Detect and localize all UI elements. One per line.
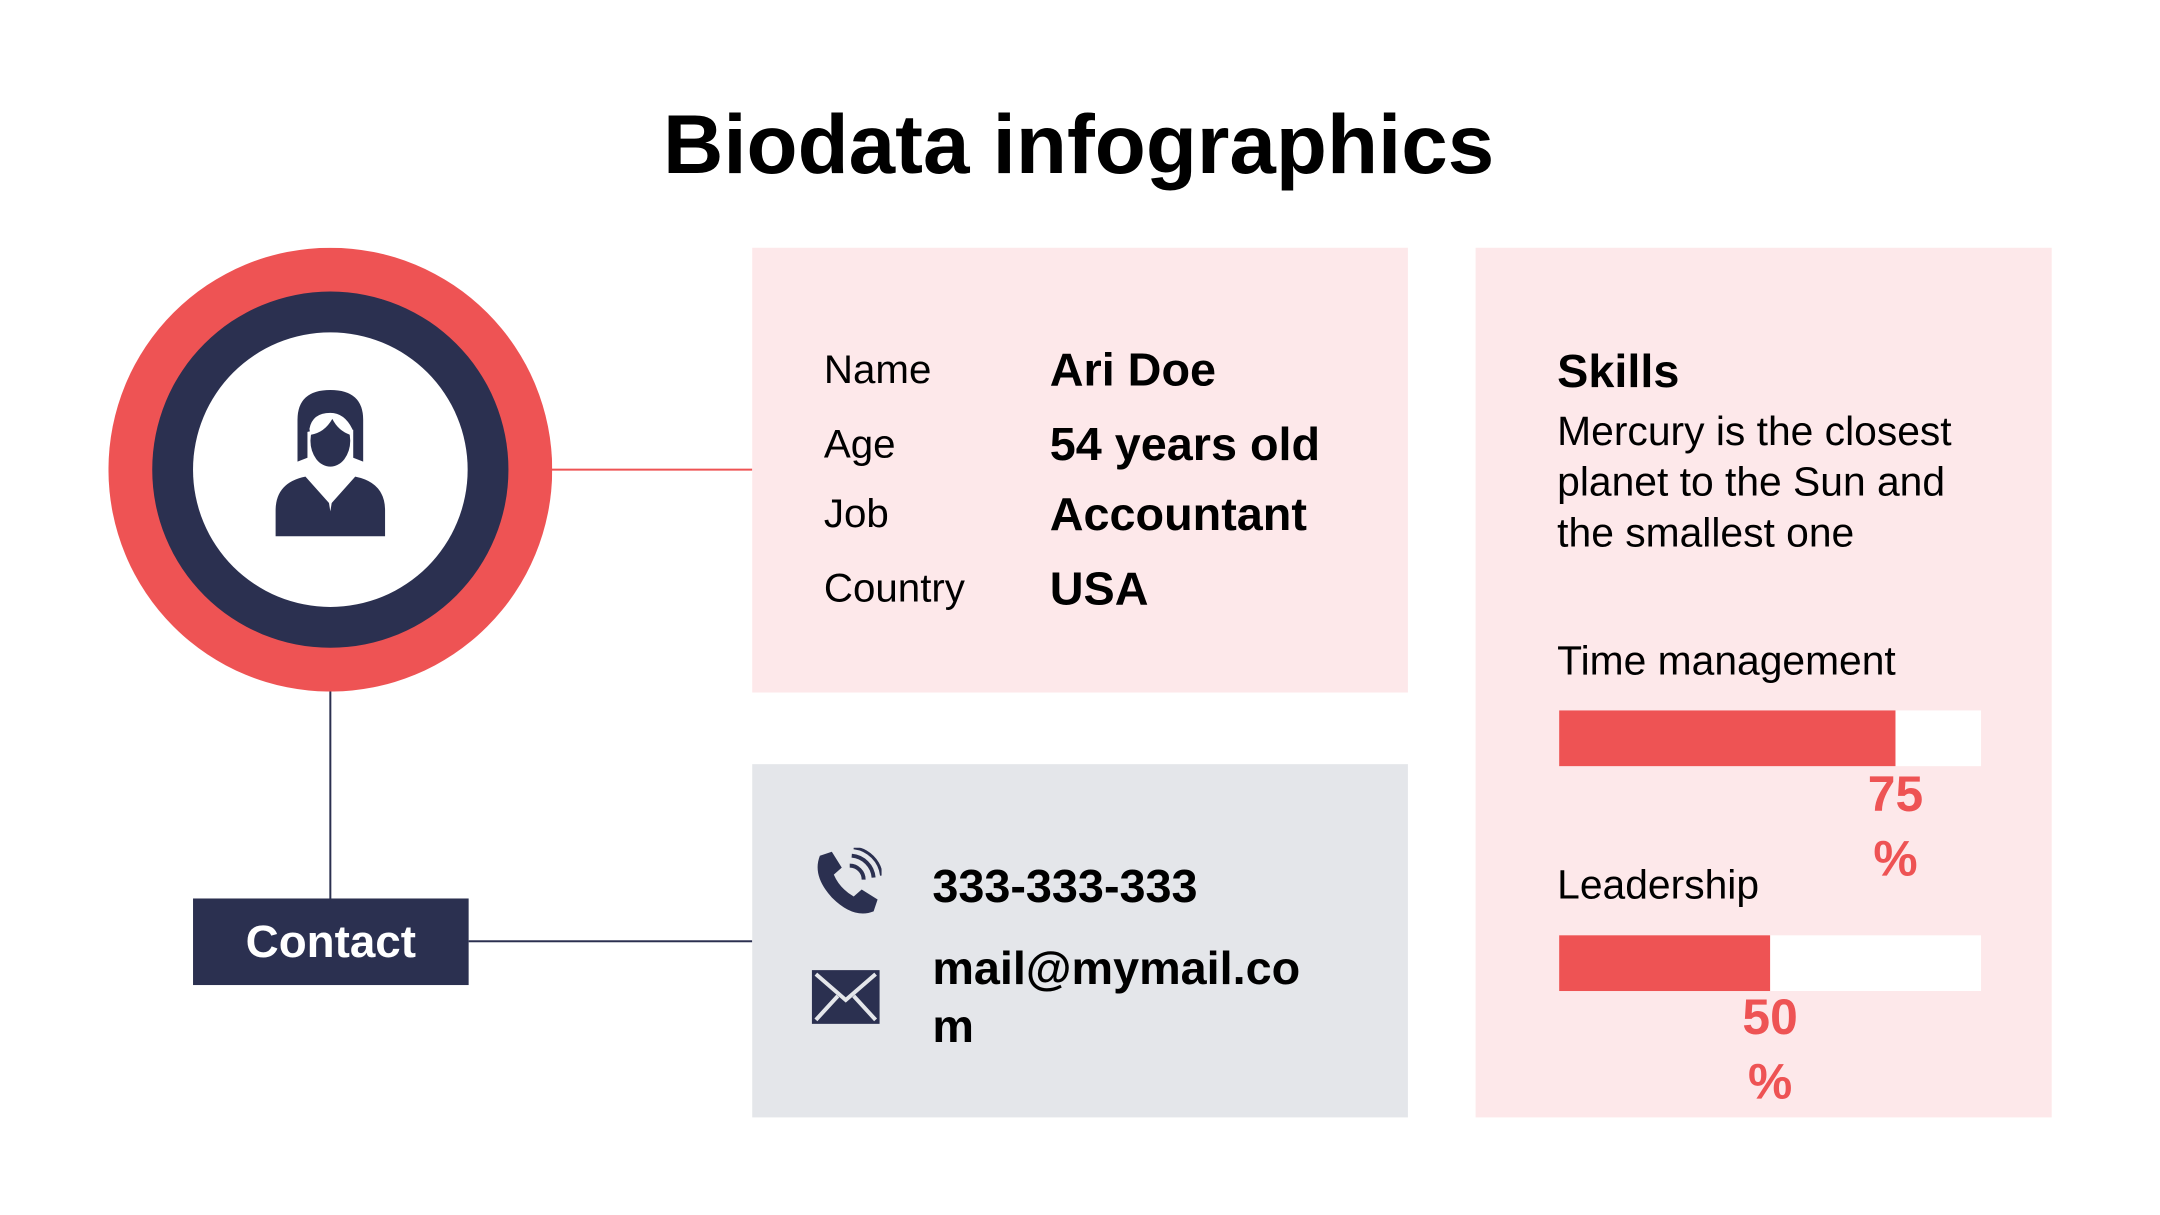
panel: skills: Leadership: [1557, 862, 1759, 907]
avatar circle: [108, 248, 552, 692]
panel: personal info: Name: [824, 346, 931, 392]
contact label: [193, 898, 469, 985]
panel: personal info: Country: [824, 565, 965, 611]
panel: personal info: Ari Doe: [1050, 343, 1216, 396]
panel: skills: Time management: [1557, 638, 1896, 684]
connector: circle to contact: [329, 647, 331, 900]
panel: contact details: mail@mymail.co: [932, 941, 1300, 994]
panel: personal info: [752, 248, 1408, 693]
panel: contact details: [752, 764, 1408, 1117]
contact label: Contact: [246, 915, 416, 967]
panel: personal info: Job: [824, 490, 889, 536]
bar: leadership: [1559, 935, 1981, 991]
panel: contact details: m: [932, 999, 974, 1052]
panel: skills: planet to the Sun and: [1557, 459, 1945, 504]
panel: personal info: Accountant: [1050, 487, 1307, 540]
panel: personal info: USA: [1050, 562, 1148, 614]
panel: contact details: 333-333-333: [932, 859, 1198, 912]
panel: skills: 75: [1868, 766, 1923, 822]
icon: phone: [818, 848, 882, 914]
panel: skills: %: [1748, 1054, 1792, 1109]
panel: skills: %: [1873, 831, 1918, 887]
bar: time management: [1559, 710, 1981, 766]
panel: skills: [1476, 248, 2052, 1117]
panel: skills: Mercury is the closest: [1557, 408, 1952, 454]
connector: contact to panel: [469, 940, 752, 942]
panel: personal info: 54 years old: [1050, 417, 1320, 470]
connector: circle to info: [551, 469, 752, 471]
icon: mail: [812, 970, 880, 1024]
panel: personal info: Age: [824, 421, 896, 466]
panel: skills: 50: [1742, 989, 1798, 1045]
title: Biodata infographics: [663, 98, 1494, 191]
panel: skills: the smallest one: [1557, 509, 1854, 555]
panel: skills: Skills: [1557, 344, 1679, 397]
icon: woman: [276, 390, 385, 536]
